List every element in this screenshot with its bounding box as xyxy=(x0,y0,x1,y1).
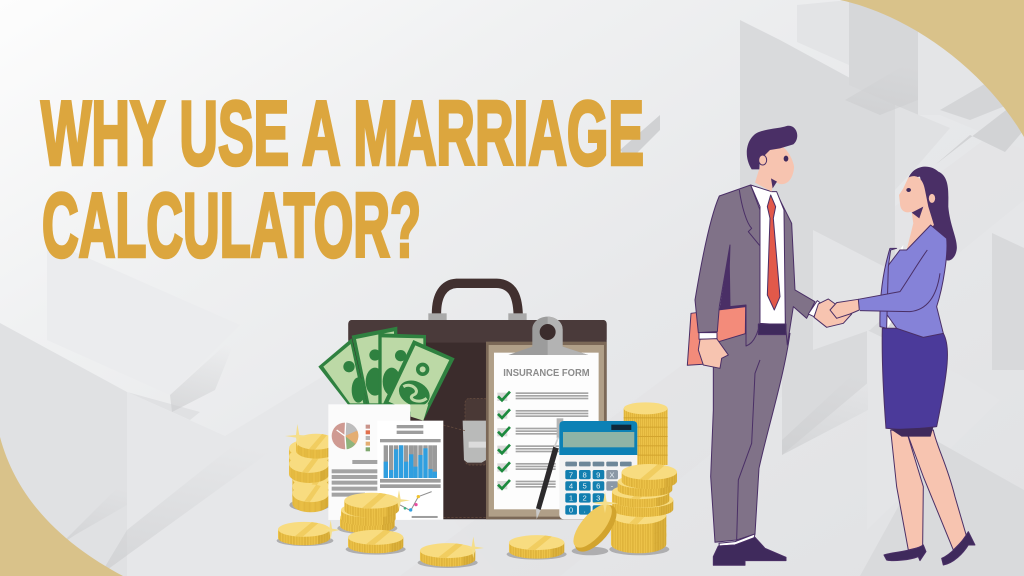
coin stack back left xyxy=(285,424,336,512)
calculator key labels: - xyxy=(611,482,614,491)
clipboard clip xyxy=(508,317,588,355)
calculator xyxy=(557,418,637,519)
pen xyxy=(536,437,559,519)
calculator key labels xyxy=(569,470,615,515)
loose coins xyxy=(277,520,567,568)
calculator key labels: . xyxy=(584,506,586,515)
man's shoes xyxy=(713,534,786,565)
jacket xyxy=(695,185,760,346)
gold corner: bottom left xyxy=(0,437,123,576)
calculator key labels: 6 xyxy=(596,482,600,491)
calculator key labels: 0 xyxy=(569,506,573,515)
hair xyxy=(747,126,797,169)
belt xyxy=(758,324,786,335)
tie xyxy=(767,195,780,310)
title line 2: CALCULATOR? xyxy=(42,176,421,276)
arm xyxy=(858,250,943,312)
calculator key labels: X xyxy=(609,470,615,479)
tilted coin xyxy=(567,492,624,559)
checklist xyxy=(497,392,588,489)
woman xyxy=(858,167,975,565)
man xyxy=(687,126,815,565)
trousers xyxy=(711,330,790,542)
illustration: insurance items xyxy=(277,283,677,568)
form heading: INSURANCE FORM xyxy=(503,368,590,379)
calculator key labels: 5 xyxy=(583,482,587,491)
hair xyxy=(908,167,957,261)
illustration: man and woman shaking hands xyxy=(687,126,975,565)
blouse xyxy=(886,245,903,328)
coin stack small middle xyxy=(337,490,410,534)
shirt xyxy=(751,185,785,325)
gold corner: top right xyxy=(840,0,1024,137)
report: pie chart page xyxy=(328,404,410,520)
clipboard: insurance form xyxy=(486,317,607,519)
calculator key labels: 7 xyxy=(569,470,573,479)
calculator key labels: 4 xyxy=(569,482,574,491)
calculator key labels: 9 xyxy=(596,470,600,479)
calculator key labels: 2 xyxy=(583,494,587,503)
woman's shoes xyxy=(884,532,975,565)
coin stack front right xyxy=(609,464,677,555)
jacket xyxy=(886,225,947,337)
head xyxy=(755,145,794,192)
handshake xyxy=(808,299,859,327)
woman's legs xyxy=(891,430,967,550)
folder xyxy=(687,305,752,365)
calculator key labels: 8 xyxy=(583,470,587,479)
money: fan of dollar bills xyxy=(318,327,455,421)
man's hand on folder xyxy=(698,333,728,368)
calculator key labels: 3 xyxy=(596,494,600,503)
briefcase xyxy=(348,283,607,519)
underarm shadow xyxy=(719,243,748,310)
skirt xyxy=(882,328,947,430)
report: bar chart page xyxy=(377,421,443,520)
coin stack back right xyxy=(624,402,668,465)
face xyxy=(899,176,934,250)
calculator key labels: 1 xyxy=(569,494,573,503)
